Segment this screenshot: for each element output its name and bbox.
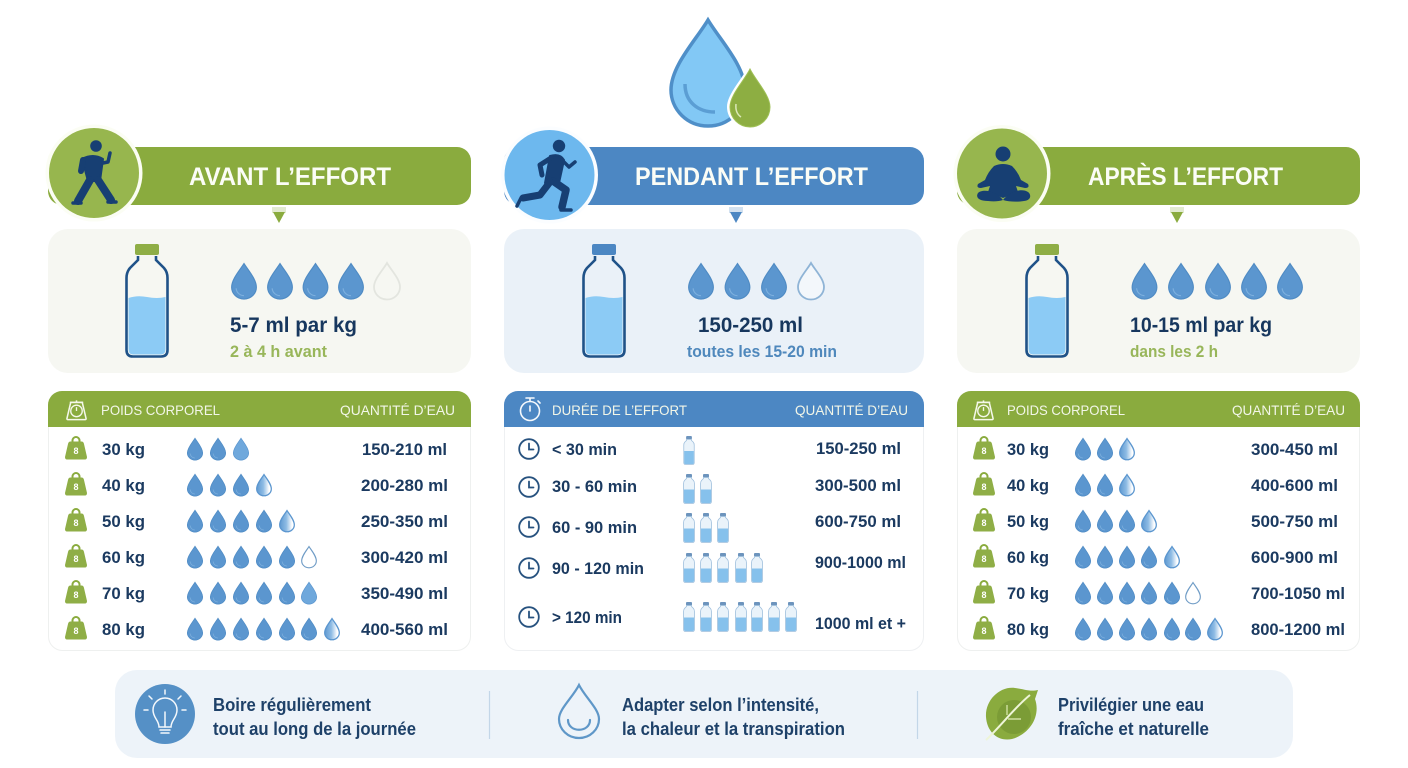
timing apres: dans les 2 h xyxy=(1130,342,1218,361)
icon: light bulb xyxy=(135,684,195,744)
row 70 kg: 8 xyxy=(73,590,79,600)
drop rating apres xyxy=(1132,264,1302,299)
row 60 kg: 300-420 ml xyxy=(361,548,448,567)
row 70 kg: 350-490 ml xyxy=(361,584,448,603)
row 60 kg: 60 kg xyxy=(1007,548,1049,567)
row 50 kg xyxy=(973,509,1338,532)
tip 2: la chaleur et la transpiration xyxy=(622,719,845,739)
banner: pendant l'effort xyxy=(501,126,924,224)
logo: water drops xyxy=(671,20,773,129)
row 30 kg xyxy=(973,437,1338,460)
tip 3: Privilégier une eau xyxy=(1058,695,1204,715)
icon: standing athlete xyxy=(73,140,116,203)
icon: bottle pendant xyxy=(584,244,624,356)
table: duree pendant: DURÉE DE L’EFFORT xyxy=(552,402,687,418)
icon: bottle apres xyxy=(1026,244,1068,356)
arrow: apres xyxy=(1170,207,1184,223)
row plus de 120 min: > 120 min xyxy=(552,608,622,627)
row 80 kg: 8 xyxy=(73,626,79,636)
table: duree pendant xyxy=(504,391,924,650)
table: poids avant: QUANTITÉ D’EAU xyxy=(340,402,455,418)
icon: meditation xyxy=(977,146,1030,202)
row 60 kg: 60 kg xyxy=(102,548,145,567)
row 30 kg: 30 kg xyxy=(1007,440,1049,459)
panel: avant summary xyxy=(48,229,471,373)
row 30 kg xyxy=(65,437,447,460)
row 60 kg: 600-900 ml xyxy=(1251,548,1338,567)
row 50 kg xyxy=(65,509,448,532)
row 60 kg xyxy=(65,545,448,568)
table: duree pendant: QUANTITÉ D’EAU xyxy=(795,402,908,418)
row 80 kg: 400-560 ml xyxy=(361,620,448,639)
row moins de 30 min: 150-250 ml xyxy=(816,439,901,458)
row 40 kg xyxy=(65,473,448,496)
row 30 a 60 min: 30 - 60 min xyxy=(552,477,637,496)
row moins de 30 min xyxy=(519,436,901,465)
icon: leaf xyxy=(986,688,1038,740)
banner: pendant l'effort: PENDANT L’EFFORT xyxy=(635,163,868,191)
row 40 kg: 40 kg xyxy=(1007,476,1049,495)
row 70 kg xyxy=(65,581,448,604)
row 30 kg: 30 kg xyxy=(102,440,145,459)
row 70 kg: 70 kg xyxy=(1007,584,1049,603)
row 80 kg: 80 kg xyxy=(1007,620,1049,639)
row 50 kg: 50 kg xyxy=(1007,512,1049,531)
row 60 a 90 min xyxy=(519,512,901,542)
row 60 a 90 min: 600-750 ml xyxy=(815,512,901,531)
row 40 kg: 200-280 ml xyxy=(361,476,448,495)
row 50 kg: 250-350 ml xyxy=(361,512,448,531)
panel: pendant summary xyxy=(504,229,924,373)
row plus de 120 min: 1000 ml et + xyxy=(815,614,906,633)
row plus de 120 min xyxy=(519,602,906,633)
row 60 kg xyxy=(973,545,1338,568)
arrow: avant xyxy=(272,207,286,223)
row 50 kg: 8 xyxy=(73,518,79,528)
row 30 kg: 8 xyxy=(73,446,79,456)
tip 3 xyxy=(1058,695,1209,739)
row 60 kg: 8 xyxy=(73,554,79,564)
row 50 kg: 500-750 ml xyxy=(1251,512,1338,531)
arrow: pendant xyxy=(729,207,743,223)
icon: drop outline xyxy=(559,685,599,738)
row 30 a 60 min: 300-500 ml xyxy=(815,476,901,495)
tip 1 xyxy=(213,695,416,739)
dose apres: 10-15 ml par kg xyxy=(1130,314,1272,337)
row 40 kg: 40 kg xyxy=(102,476,145,495)
panel: apres summary xyxy=(957,229,1360,373)
tip 1: tout au long de la journée xyxy=(213,719,416,739)
row 60 kg: 8 xyxy=(981,554,987,564)
row 40 kg: 8 xyxy=(73,482,79,492)
row 60 a 90 min: 60 - 90 min xyxy=(552,518,637,537)
row 50 kg: 50 kg xyxy=(102,512,145,531)
banner: apres l'effort: APRÈS L’EFFORT xyxy=(1088,162,1283,191)
banner: avant l'effort xyxy=(46,124,471,222)
dose avant: 5-7 ml par kg xyxy=(230,314,357,337)
table: poids avant xyxy=(48,391,471,650)
row 30 kg: 8 xyxy=(981,446,987,456)
drop rating pendant xyxy=(689,263,824,300)
table: poids apres xyxy=(957,391,1360,650)
row 30 a 60 min xyxy=(519,474,901,504)
icon: stopwatch xyxy=(520,398,540,420)
table: poids avant: POIDS CORPOREL xyxy=(101,402,220,418)
drop rating avant xyxy=(232,263,400,300)
banner: apres l'effort xyxy=(954,125,1360,222)
row 40 kg: 400-600 ml xyxy=(1251,476,1338,495)
row 90 a 120 min xyxy=(519,553,906,582)
row 80 kg xyxy=(65,617,448,640)
row 70 kg: 700-1050 ml xyxy=(1251,584,1345,603)
table: poids apres: POIDS CORPOREL xyxy=(1007,402,1125,418)
tip 2 xyxy=(622,695,845,739)
row 90 a 120 min: 900-1000 ml xyxy=(815,553,906,572)
row 80 kg: 800-1200 ml xyxy=(1251,620,1345,639)
row 70 kg: 70 kg xyxy=(102,584,145,603)
row 70 kg: 8 xyxy=(981,590,987,600)
row 50 kg: 8 xyxy=(981,518,987,528)
icon: bottle avant xyxy=(126,244,168,356)
tip 3: fraîche et naturelle xyxy=(1058,719,1209,739)
row 40 kg: 8 xyxy=(981,482,987,492)
dose pendant: 150-250 ml xyxy=(698,314,803,337)
row 80 kg: 80 kg xyxy=(102,620,145,639)
row 40 kg xyxy=(973,473,1338,496)
row 80 kg: 8 xyxy=(981,626,987,636)
tip 1: Boire régulièrement xyxy=(213,695,371,715)
row 80 kg xyxy=(973,617,1345,640)
banner: avant l'effort: AVANT L’EFFORT xyxy=(189,163,391,191)
timing avant: 2 à 4 h avant xyxy=(230,342,327,361)
row moins de 30 min: < 30 min xyxy=(552,440,617,459)
tip 2: Adapter selon l’intensité, xyxy=(622,695,819,715)
panel: conseils xyxy=(115,670,1293,758)
row 70 kg xyxy=(973,581,1345,604)
row 30 kg: 150-210 ml xyxy=(362,440,447,459)
table: poids apres: QUANTITÉ D’EAU xyxy=(1232,402,1345,418)
row 90 a 120 min: 90 - 120 min xyxy=(552,559,644,578)
icon: runner xyxy=(517,140,575,210)
row 30 kg: 300-450 ml xyxy=(1251,440,1338,459)
timing pendant: toutes les 15-20 min xyxy=(687,342,837,361)
